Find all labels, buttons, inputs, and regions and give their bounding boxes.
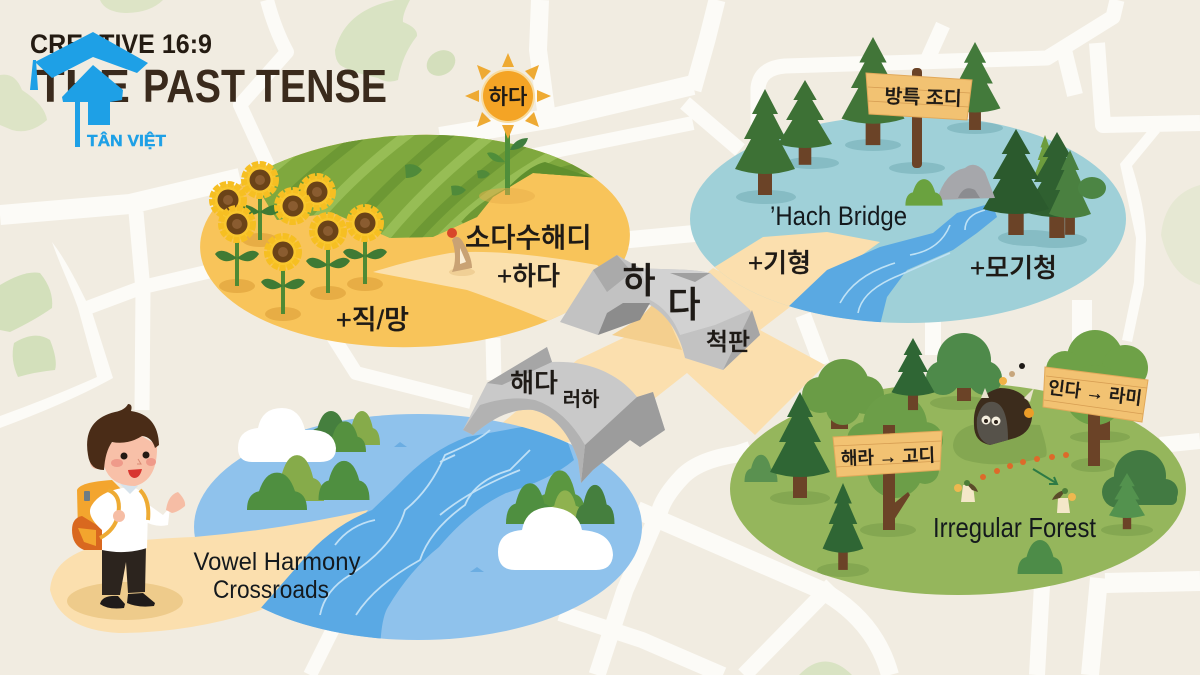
- round trees: [802, 330, 1148, 530]
- sign: right: 인다 → 라미: [1047, 377, 1143, 409]
- label: meadow words: +직/망: [336, 305, 409, 335]
- title: PAST TENSE: [143, 60, 387, 112]
- panel: sunflower meadow: [196, 53, 640, 354]
- central path band: [500, 268, 825, 445]
- logo arrow: [62, 65, 123, 125]
- label: bridge characters: [510, 368, 599, 411]
- sunflowers: [212, 164, 387, 321]
- label: bridge characters: 해다: [510, 368, 558, 398]
- panel: lower stone bridge: [463, 347, 665, 483]
- bridge body: [463, 347, 665, 483]
- icon: sun flower with label: 하다: [489, 86, 527, 109]
- label: bridge characters: [622, 260, 750, 356]
- lake ground: [690, 115, 1126, 323]
- label: Vowel Harmony Crossroads: Crossroads: [213, 576, 329, 604]
- river: [261, 427, 574, 638]
- sign: right: [1043, 367, 1148, 422]
- meadow ground: [196, 128, 634, 354]
- signpost: 방특 조디: [884, 86, 962, 110]
- panel: Irregular Forest: [730, 330, 1186, 595]
- logo: Tan Viet: [30, 32, 167, 150]
- right bush and tree: [1102, 450, 1178, 529]
- sign: left: 해라 → 고디: [841, 445, 935, 469]
- shadows: [770, 396, 1153, 577]
- starting path: [50, 510, 368, 633]
- label: bridge characters: 다: [667, 284, 701, 325]
- forest ground: [730, 383, 1186, 595]
- pine trees: [744, 338, 935, 570]
- small figures: [954, 480, 1076, 513]
- bridge body: [560, 255, 760, 370]
- rock and bush: [905, 165, 995, 206]
- panel: upper stone bridge: [560, 255, 760, 370]
- label: bridge characters: 러하: [563, 388, 599, 411]
- logo cap: [35, 32, 148, 78]
- bottom bush: [1018, 540, 1062, 574]
- label: Hach Bridge: ’Hach Bridge: [770, 201, 907, 231]
- icon: sun flower with label: [465, 53, 551, 204]
- cream path at lake: [714, 232, 880, 306]
- label: plus forms: +기형: [748, 248, 811, 278]
- river: [780, 203, 997, 325]
- label: bridge characters: 척판: [706, 329, 750, 356]
- bridge shading: [593, 255, 760, 370]
- label: meadow words: 소다수해디: [465, 222, 592, 253]
- label: Irregular Forest: Irregular Forest: [933, 512, 1096, 543]
- panel: Vowel Harmony river: [50, 408, 642, 660]
- signpost: [866, 68, 972, 174]
- label: plus forms: [748, 248, 1057, 283]
- head: [87, 404, 159, 486]
- label: meadow words: +하다: [497, 261, 560, 291]
- water ground: [194, 414, 642, 640]
- cream path in meadow: [373, 252, 598, 321]
- label: plus forms: +모기청: [970, 253, 1057, 283]
- striped field: [263, 134, 594, 238]
- icon: small creature on path: [447, 228, 475, 276]
- bridge shading: [463, 347, 665, 483]
- backpack: [72, 480, 122, 550]
- label: Vowel Harmony Crossroads: Vowel Harmony: [194, 548, 361, 576]
- title: CREATIVE 16:9: [30, 29, 212, 59]
- label: meadow words: [336, 222, 592, 335]
- label: Vowel Harmony Crossroads: [194, 548, 361, 604]
- character: boy with backpack: [67, 404, 185, 620]
- logo line and tassel: [30, 60, 80, 147]
- hills and clouds: [238, 408, 614, 572]
- title: THE: [36, 60, 130, 112]
- logo text: TÂN VIỆT: [87, 132, 167, 150]
- shirt and arm: [90, 482, 185, 552]
- panel: Hach Bridge lake forest: [690, 37, 1126, 330]
- sign: left: [833, 431, 942, 477]
- legs and shoes: [100, 546, 155, 608]
- title: [30, 29, 387, 112]
- arch opening: [612, 305, 682, 350]
- beast: [974, 363, 1034, 445]
- dotted trail and arrow: [980, 452, 1069, 484]
- pine trees: [735, 37, 1106, 248]
- label: bridge characters: 하: [622, 260, 656, 301]
